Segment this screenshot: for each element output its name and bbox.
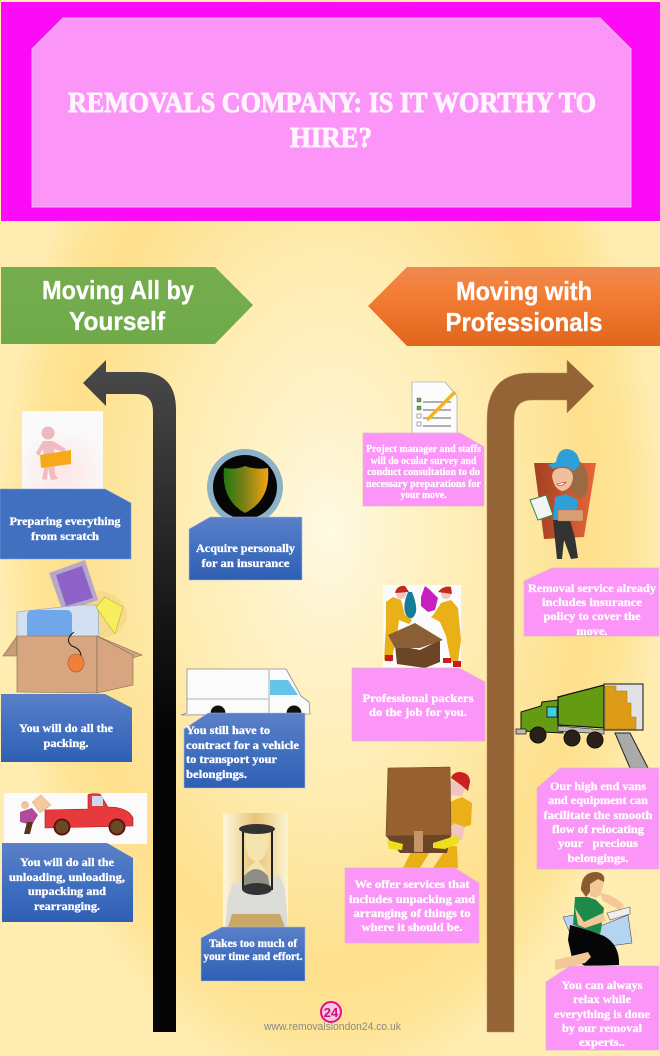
callout: vehicle: contract for a vehicle bbox=[186, 738, 300, 752]
callout: unloading: You will do all the bbox=[20, 855, 115, 869]
callout: vehicle bbox=[184, 713, 305, 788]
callout: insurance bbox=[189, 517, 302, 580]
callout: relax: by our removal bbox=[562, 1021, 643, 1035]
callout: project manager: necessary preparations for bbox=[366, 479, 481, 490]
arrow: brown path up and right bbox=[487, 360, 594, 1032]
callout: unpacking services: includes unpacking and bbox=[349, 892, 475, 906]
callout: relax bbox=[546, 966, 659, 1050]
callout: packing bbox=[1, 694, 132, 762]
icon: white van bbox=[181, 669, 310, 720]
callout: vehicle: to transport your bbox=[186, 752, 278, 766]
callout: high end vans: flow of relocating bbox=[552, 822, 644, 836]
icon: moving box with computer bbox=[3, 560, 142, 693]
callout: time bbox=[201, 927, 305, 981]
icon: insurance shield bbox=[207, 449, 283, 525]
callout: unpacking services bbox=[345, 868, 479, 943]
callout: high end vans: facilitate the smooth bbox=[544, 808, 653, 822]
callout: unpacking services: We offer services that bbox=[354, 877, 470, 891]
arrow: black path up and left bbox=[83, 360, 176, 1032]
heading arrow: moving all by yourself: Moving All by bbox=[42, 275, 194, 305]
callout: relax: You can always bbox=[562, 978, 643, 992]
callout: insurance policy included: includes insurance bbox=[542, 595, 643, 609]
callout: relax: relax while bbox=[573, 992, 632, 1006]
callout: preparing everything: Preparing everything bbox=[10, 514, 120, 528]
title text bbox=[68, 88, 596, 154]
callout: time: Takes too much of bbox=[209, 936, 298, 950]
callout: time: your time and effort. bbox=[204, 949, 302, 963]
icon: man loading red pickup truck bbox=[4, 793, 147, 844]
title banner bbox=[1, 2, 660, 221]
callout: project manager: your move. bbox=[400, 490, 447, 501]
callout: project manager bbox=[363, 433, 484, 506]
callout: unpacking services: where it should be. bbox=[362, 920, 462, 934]
icon: checklist and pencil bbox=[412, 382, 457, 433]
callout: project manager: conduct consultation to do bbox=[367, 467, 480, 478]
callout: preparing everything: from scratch bbox=[31, 529, 99, 543]
callout: insurance policy included: policy to cover the bbox=[544, 609, 641, 623]
icon: hourglass on table bbox=[223, 813, 288, 927]
icon: woman relaxing on pillows bbox=[555, 872, 632, 970]
callout: insurance policy included bbox=[524, 568, 659, 638]
callout: unloading: rearranging. bbox=[34, 899, 100, 913]
callout: professional packers: do the job for you. bbox=[369, 705, 467, 719]
title text: HIRE? bbox=[290, 123, 372, 154]
heading arrow: moving with professionals bbox=[368, 267, 660, 346]
logo: 24 badge and website: www.removalslondon24.co.uk bbox=[263, 1021, 401, 1033]
callout: high end vans: and equipment can bbox=[548, 793, 648, 807]
heading arrow: moving with professionals: Professionals bbox=[446, 307, 602, 337]
callout: packing: You will do all the bbox=[19, 721, 114, 735]
callout: insurance policy included: Removal service already bbox=[528, 581, 656, 595]
heading arrow: moving all by yourself bbox=[1, 267, 253, 344]
callout: high end vans: Our high end vans bbox=[550, 779, 646, 793]
callout: packing: packing. bbox=[44, 736, 88, 750]
callout: vehicle: You still have to bbox=[186, 723, 270, 737]
icon: woman with clipboard and parcel bbox=[530, 449, 596, 559]
callout: project manager: Project manager and staffs bbox=[366, 444, 481, 455]
logo: 24 badge and website: 24 bbox=[324, 1005, 339, 1020]
callout: vehicle: belongings. bbox=[186, 767, 247, 781]
callout: unloading: unpacking and bbox=[28, 884, 106, 898]
callout: insurance: for an insurance bbox=[202, 556, 290, 570]
icon: green moving truck with ramp bbox=[516, 684, 648, 768]
callout: preparing everything bbox=[0, 489, 131, 559]
title text: REMOVALS COMPANY: IS IT WORTHY TO bbox=[68, 88, 596, 119]
callout: relax: everything is done bbox=[554, 1007, 651, 1021]
callout: unloading bbox=[2, 843, 133, 922]
callout: high end vans: belongings. bbox=[568, 851, 628, 865]
icon: figure carrying box bbox=[22, 411, 103, 489]
icon: mover carrying large box bbox=[386, 767, 472, 868]
callout: insurance: Acquire personally bbox=[196, 541, 295, 555]
title panel bbox=[32, 18, 631, 207]
callout: project manager: will do ocular survey and bbox=[370, 456, 477, 467]
heading arrow: moving all by yourself: Yourself bbox=[69, 306, 165, 336]
callout: professional packers: Professional packers bbox=[362, 691, 474, 705]
heading arrow: moving with professionals: Moving with bbox=[456, 276, 592, 306]
callout: relax: experts.. bbox=[579, 1035, 625, 1049]
callout: professional packers bbox=[352, 668, 485, 741]
callout: high end vans: your precious bbox=[558, 836, 638, 850]
callout: insurance policy included: move. bbox=[576, 624, 608, 638]
callout: unpacking services: arranging of things to bbox=[354, 906, 470, 920]
icon: two packers with box bbox=[383, 585, 461, 668]
callout: high end vans bbox=[537, 768, 659, 869]
logo: 24 badge and website bbox=[263, 1002, 401, 1033]
callout: unloading: unloading, unloading, bbox=[9, 870, 125, 884]
